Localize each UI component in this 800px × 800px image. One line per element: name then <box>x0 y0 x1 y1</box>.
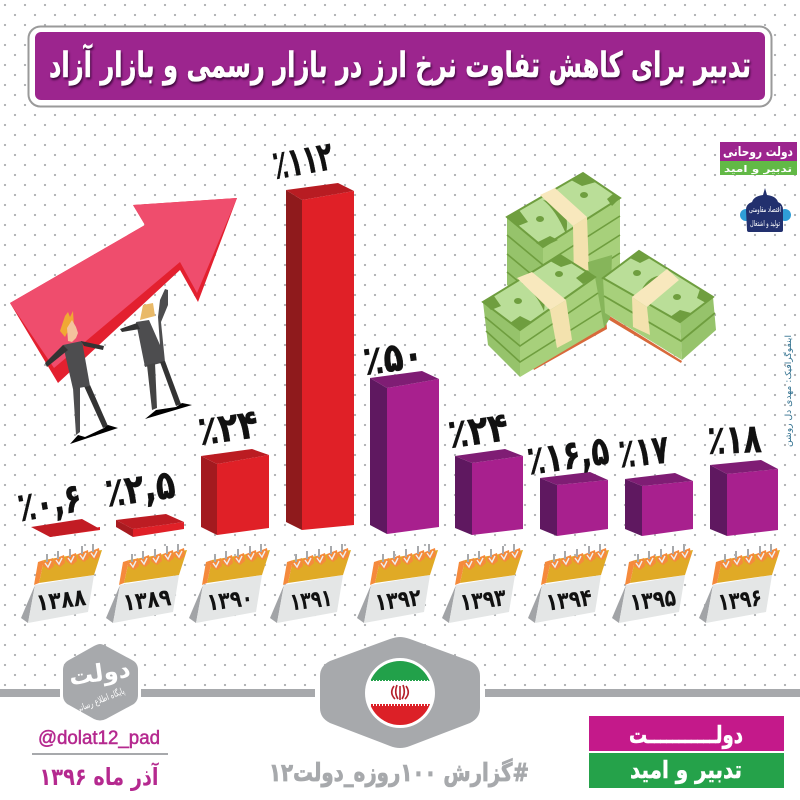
handle: telegram id: @dolat12_pad <box>38 728 160 749</box>
brand box: dolat, tadbir va omid <box>589 716 784 788</box>
footer logo: dolat site seal <box>63 644 138 720</box>
logo: resistance economy slogan: اقتصاد مقاومتی <box>749 205 781 214</box>
bar 1396 <box>710 460 778 536</box>
bar value labels <box>14 133 762 531</box>
calendar 1388: ۱۳۸۸ <box>35 583 88 617</box>
bar 1392 <box>370 371 439 534</box>
calendar 1395: ۱۳۹۵ <box>628 583 678 617</box>
bar value labels: ٪۱۶,۵ <box>524 428 612 485</box>
footer logo: dolat site seal: پایگاه اطلاع رسانی <box>74 685 127 715</box>
bar value labels: ٪۰,۶ <box>14 475 85 531</box>
title banner <box>28 26 772 106</box>
bar chart: currency gap by year <box>31 183 778 537</box>
bar value labels: ٪۱۱۲ <box>269 133 336 189</box>
calendar 1395 <box>612 544 693 623</box>
logo: resistance economy slogan <box>740 188 791 232</box>
calendar 1392 <box>357 544 438 623</box>
calendar 1394 <box>528 544 609 623</box>
bar 1395 <box>625 473 693 536</box>
brand box: dolat, tadbir va omid: تدبیر و امید <box>630 756 742 784</box>
calendar 1390: ۱۳۹۰ <box>205 583 255 617</box>
illustration: stacks of green banknotes <box>483 173 716 377</box>
calendar 1393: ۱۳۹۳ <box>458 583 508 617</box>
calendar 1392: ۱۳۹۲ <box>373 583 423 617</box>
illustration: two men lifting the arrow <box>45 289 192 444</box>
illustration: pink rising arrow <box>10 198 237 383</box>
calendar 1388 <box>21 544 102 623</box>
calendar 1396: ۱۳۹۶ <box>716 583 764 617</box>
calendar 1394: ۱۳۹۴ <box>544 583 594 617</box>
bar value labels: ٪۲۴ <box>445 404 511 458</box>
badge: dolat rouhani <box>720 142 797 175</box>
brand box: dolat, tadbir va omid: دولـــــــــــت <box>629 721 743 749</box>
bar value labels: ٪۲,۵ <box>102 461 178 517</box>
calendar 1390 <box>189 544 270 623</box>
calendar 1389: ۱۳۸۹ <box>121 583 173 617</box>
calendar 1391: ۱۳۹۱ <box>288 584 334 617</box>
bar value labels: ٪۵۰ <box>360 331 426 385</box>
badge: dolat rouhani: تدبیر و امید <box>724 165 792 175</box>
bar 1390 <box>201 449 269 535</box>
calendar 1389 <box>106 544 187 623</box>
calendar 1391 <box>270 544 351 623</box>
footer divider bar <box>0 689 800 697</box>
bar 1388 <box>31 519 100 537</box>
center badge: iran flag <box>320 637 480 748</box>
hashtag: #گزارش ۱۰۰روزه_دولت۱۲ <box>269 758 529 788</box>
bar 1389 <box>116 514 184 537</box>
date text: آذر ماه ۱۳۹۶ <box>40 762 159 791</box>
bar 1393 <box>455 449 523 535</box>
footer logo: dolat site seal: دولت <box>67 655 132 691</box>
bar 1394 <box>540 472 608 536</box>
bar value labels: ٪۱۷ <box>616 427 671 478</box>
calendar 1393 <box>442 544 523 623</box>
calendar 1396 <box>699 544 780 623</box>
bar value labels: ٪۲۴ <box>195 401 261 455</box>
bar value labels: ٪۱۸ <box>707 416 762 464</box>
divider under handle <box>32 753 168 755</box>
bar 1391 <box>286 183 354 530</box>
credit: vertical designer text: اینفوگرافیک: مهدی دل روشن <box>783 335 794 447</box>
logo: resistance economy slogan: تولید و اشتغال <box>750 219 780 228</box>
